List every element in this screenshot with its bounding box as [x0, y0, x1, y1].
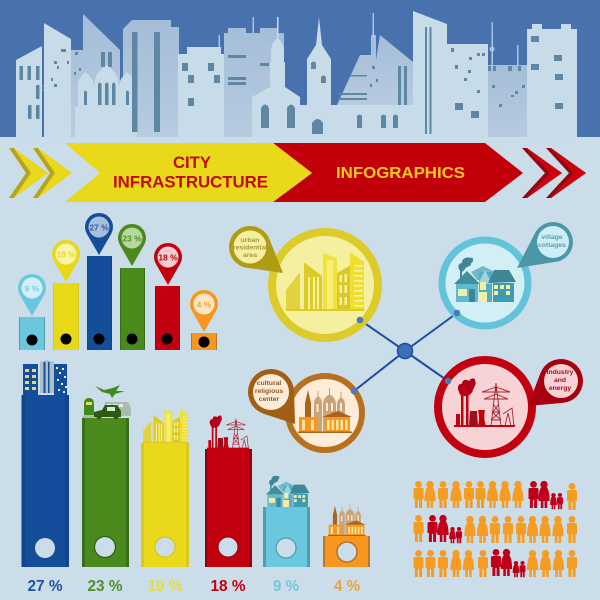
large bar: 18 percent industry: [205, 415, 252, 567]
people row 2: [414, 515, 577, 543]
circle: industry and energy: industry: [547, 369, 574, 376]
banner: infographics: [273, 143, 523, 202]
banner: city infrastructure: [65, 143, 312, 202]
percentage labels: 23 %: [88, 578, 122, 595]
percentage labels: 9 %: [273, 578, 299, 595]
percentage labels: [28, 578, 360, 595]
bar 23 percent: 23 %: [122, 234, 142, 244]
bar 18 percent: 18 %: [158, 252, 178, 262]
people row 3: [414, 549, 577, 577]
circle: cultural religious center: center: [259, 396, 280, 403]
circle: urban residential area: area: [243, 252, 257, 259]
bar 18 percent: [154, 243, 182, 350]
circle: urban residential area: [229, 226, 378, 338]
large bar: 19 percent urban: [141, 409, 189, 567]
banner: city infrastructure: CITY: [173, 153, 212, 172]
small bar chart with pins: [18, 213, 218, 350]
bar 19 percent: 19 %: [56, 250, 76, 260]
bar 4 percent: [190, 290, 218, 350]
network hub and nodes: [351, 310, 460, 394]
circle: cultural religious center: [248, 369, 362, 450]
left chevrons: [9, 148, 72, 198]
skyline panel: [0, 0, 600, 137]
circle: industry and energy: energy: [549, 385, 571, 392]
large bar: 23 percent transport: [82, 385, 131, 567]
circle: village cottages: village: [541, 234, 563, 241]
circle: village cottages: [442, 222, 573, 326]
people rows: [414, 481, 577, 577]
bar 4 percent: 4 %: [197, 300, 212, 310]
circle: industry and energy: and: [554, 377, 566, 384]
circle: cultural religious center: cultural: [257, 380, 281, 387]
percentage labels: 18 %: [210, 578, 246, 595]
circle: urban residential area: residential: [233, 244, 267, 252]
large bar: 27 percent housing: [22, 360, 69, 567]
building windows: [20, 27, 563, 134]
large bar: 4 percent religious: [323, 504, 370, 567]
bar 19 percent: [52, 240, 80, 350]
bar 9 percent: [18, 274, 46, 350]
percentage labels: 19 %: [148, 578, 182, 595]
percentage labels: 27 %: [28, 578, 62, 595]
banner: city infrastructure: INFRASTRUCTURE: [113, 172, 268, 192]
people row 1: [414, 481, 577, 510]
bar 27 percent: 27 %: [89, 222, 109, 232]
bar 27 percent: [85, 213, 113, 350]
network connectors: [354, 313, 457, 391]
dark background buildings: [71, 13, 527, 137]
circle: village cottages: cottages: [538, 242, 566, 249]
bar 9 percent: 9 %: [25, 284, 40, 294]
circle: cultural religious center: religious: [255, 388, 283, 395]
circle: industry and energy: [438, 359, 583, 454]
large bar: 9 percent village: [263, 476, 310, 567]
light foreground buildings: [16, 11, 577, 137]
bar 23 percent: [118, 224, 146, 350]
percentage labels: 4 %: [334, 578, 360, 595]
banner: infographics: INFOGRAPHICS: [336, 165, 465, 182]
circle: urban residential area: urban: [241, 237, 259, 244]
right chevrons: [522, 148, 586, 198]
